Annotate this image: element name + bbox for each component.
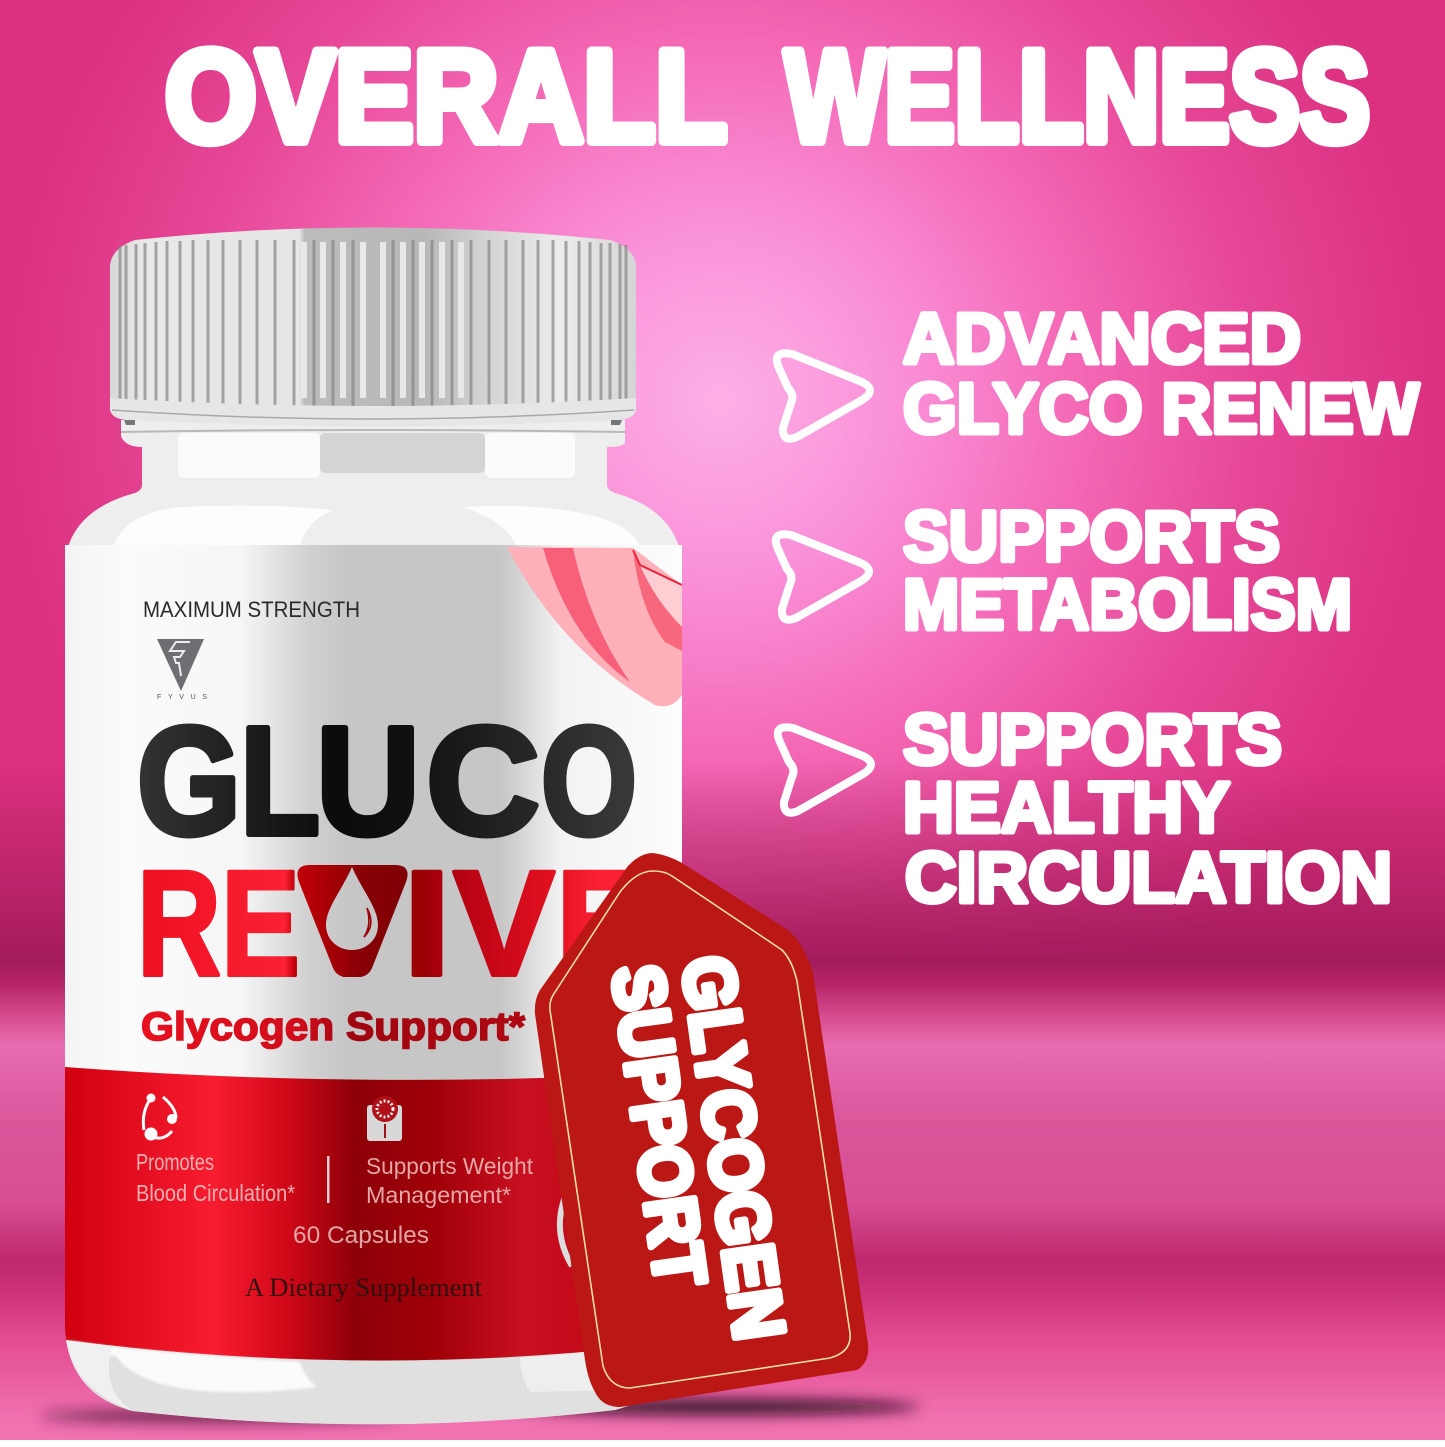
bottle neck and shoulder: [65, 420, 682, 600]
benefit 1 text: ADVANCED: [903, 300, 1301, 379]
REVIVE wordmark: I: [402, 839, 452, 1007]
REVIVE wordmark: R: [137, 839, 221, 1007]
weight claim: Management*: [366, 1182, 511, 1208]
tag text: SUPPORT: [596, 960, 720, 1291]
circulation claim: Promotes: [136, 1149, 214, 1175]
circulation claim: Blood Circulation*: [136, 1180, 295, 1206]
benefit 2 text: SUPPORTS: [903, 498, 1280, 577]
glycogen support hang tag: [535, 853, 868, 1407]
label divider: [327, 1156, 330, 1203]
benefit 3 text: CIRCULATION: [905, 839, 1392, 918]
product bottle: [65, 228, 682, 1430]
background wall: [0, 0, 1445, 965]
REVIVE wordmark: V: [453, 839, 555, 1007]
tag text: [596, 951, 799, 1344]
GLUCO wordmark: U: [316, 695, 420, 867]
tag text: GLYCOGEN: [666, 951, 799, 1344]
REVIVE wordmark: E: [556, 839, 646, 1007]
bottle shadow: [40, 1399, 920, 1423]
GLUCO wordmark: C: [426, 695, 540, 867]
blood drop V: [297, 865, 408, 977]
benefit 2 text: METABOLISM: [903, 566, 1352, 645]
benefit 3 text: [903, 701, 1392, 918]
icon: weight scale: [367, 1096, 402, 1141]
REVIVE wordmark: [137, 839, 646, 1007]
GLUCO wordmark: G: [137, 695, 241, 867]
benefit 2 text: [903, 498, 1352, 645]
tag stitched outline: [550, 871, 850, 1388]
GLUCO wordmark: O: [541, 695, 637, 867]
title: OVERALL: [165, 23, 725, 169]
arrow icon: [777, 353, 870, 439]
bottom gloss: [66, 1338, 628, 1424]
benefit 3 text: SUPPORTS: [903, 701, 1282, 780]
benefit 3: [778, 701, 1392, 918]
red label band: [65, 1067, 584, 1360]
weight claim: Supports Weight: [366, 1153, 534, 1179]
REVIVE wordmark: V: [312, 839, 392, 1007]
icon: circulation: [143, 1095, 176, 1139]
dietary supplement: A Dietary Supplement: [245, 1273, 483, 1302]
maximum strength line: MAXIMUM STRENGTH: [143, 597, 360, 622]
benefit 2: [776, 498, 1352, 645]
benefit 3 text: HEALTHY: [903, 769, 1230, 848]
brand logo: FYVUS: [157, 694, 207, 701]
arrow icon: [776, 534, 869, 620]
benefit 1: [777, 300, 1419, 449]
white arc behind tag: [560, 1197, 572, 1266]
red silk swoosh: [507, 547, 682, 706]
bottle body: [65, 545, 682, 1430]
brand logo: [157, 639, 207, 701]
arrow icon: [778, 727, 871, 813]
capsule count: 60 Capsules: [293, 1222, 429, 1249]
benefit 1 text: [903, 300, 1419, 449]
benefit 1 text: GLYCO RENEW: [903, 370, 1419, 449]
glycogen support tagline: Glycogen Support*: [141, 1005, 525, 1049]
bottle cap: [110, 228, 636, 426]
REVIVE wordmark: E: [221, 839, 300, 1007]
background floor: [0, 960, 1445, 1440]
GLUCO wordmark: L: [240, 695, 320, 867]
